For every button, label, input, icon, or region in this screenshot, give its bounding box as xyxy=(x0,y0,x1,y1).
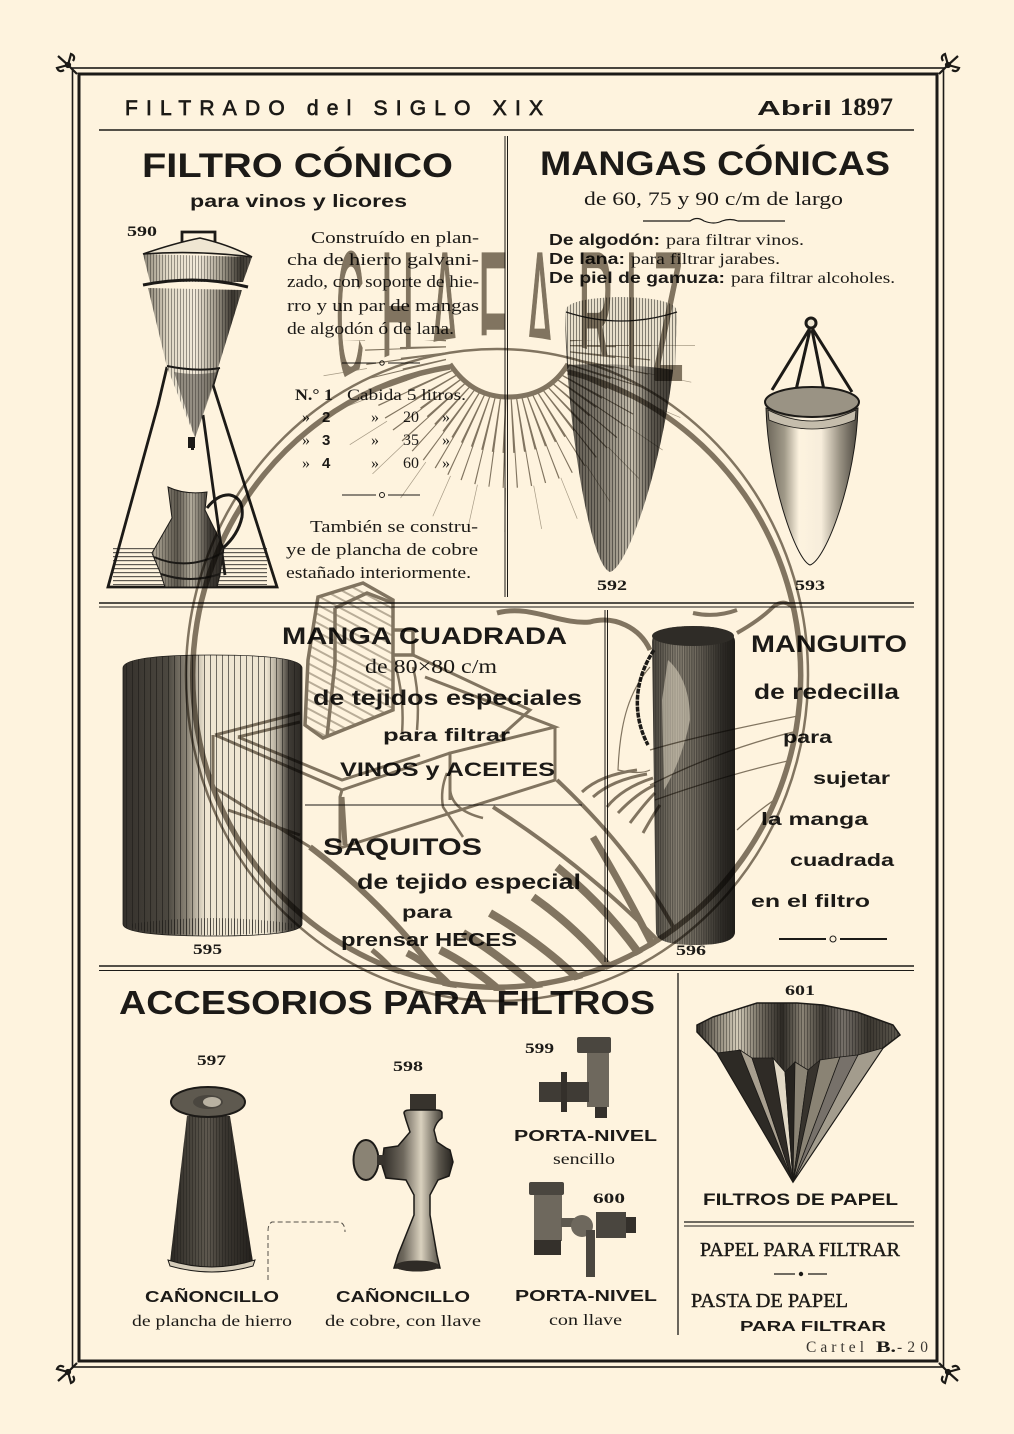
cords xyxy=(772,328,852,410)
description text: cha de hierro galvani- xyxy=(287,250,479,269)
label: porta-nivel con llave: con llave xyxy=(549,1312,622,1329)
illustration: tap 598 xyxy=(354,1094,453,1272)
item number 590: 590 xyxy=(127,224,157,240)
size table: N.° 1 xyxy=(295,387,333,404)
label 600: 600 xyxy=(593,1191,625,1207)
label: porta-nivel sencillo: PORTA-NIVEL xyxy=(514,1128,657,1145)
heading: saquitos: SAQUITOS xyxy=(323,834,482,861)
faint print marks xyxy=(268,1222,345,1280)
catalog number: Cartel xyxy=(806,1339,864,1356)
note: también en cobre xyxy=(286,517,478,582)
stamp word: F xyxy=(478,214,507,420)
panel: manguito xyxy=(637,626,907,959)
size table: Cabida 5 litros. xyxy=(347,387,466,404)
size table: » xyxy=(442,409,450,426)
stamp word: A xyxy=(525,215,554,420)
panel: filtro cónico xyxy=(108,147,479,587)
panel: mangas cónicas xyxy=(540,145,895,594)
illustration: hanging sleeve 593 xyxy=(765,318,859,565)
text: de tejidos especiales: de tejidos especiales xyxy=(313,687,582,710)
label: cañoncillo hierro xyxy=(132,1286,292,1330)
size table: » xyxy=(371,432,379,449)
stamp word: A xyxy=(430,215,459,420)
handle xyxy=(354,1140,378,1180)
description text: Construído en plan- xyxy=(311,228,479,247)
ornament xyxy=(779,936,887,942)
size table: 20 xyxy=(403,409,419,426)
stamp word: R xyxy=(578,213,614,420)
text: cuadrada: cuadrada xyxy=(790,850,894,870)
size table: 3 xyxy=(322,432,330,449)
illustration: cylinder 595 xyxy=(123,655,302,936)
label: cañoncillo hierro: de plancha de hierro xyxy=(132,1313,292,1330)
size table: » xyxy=(371,409,379,426)
description text: de algodón ó de lana. xyxy=(287,319,454,338)
materials list: para filtrar vinos. xyxy=(666,232,804,249)
stamp word: H xyxy=(381,215,414,420)
text: para filtrar: para filtrar xyxy=(383,725,510,745)
bag xyxy=(766,408,858,565)
size table: 35 xyxy=(403,432,419,449)
text: la manga: la manga xyxy=(761,809,868,829)
illustration: conical sleeve 592 xyxy=(565,297,677,572)
text: de tejido especial: de tejido especial xyxy=(357,871,581,894)
label 592: 592 xyxy=(597,578,627,594)
label: porta-nivel sencillo: sencillo xyxy=(553,1151,615,1168)
jug xyxy=(152,487,224,587)
text: para filtrar: PARA FILTRAR xyxy=(740,1318,886,1335)
text: de redecilla: de redecilla xyxy=(754,681,899,704)
spout xyxy=(188,437,195,448)
stand legs xyxy=(108,367,277,587)
materials list: para filtrar jarabes. xyxy=(631,251,780,268)
front pleats xyxy=(717,1048,883,1182)
illustration: conical filter on stand with jug xyxy=(108,232,277,587)
stamp zigzag book xyxy=(213,655,555,848)
materials list: De piel de gamuza: xyxy=(549,270,725,287)
illustration: pleated paper filter xyxy=(697,1003,900,1182)
catalog number xyxy=(806,1339,928,1356)
heading: filtro cónico: FILTRO CÓNICO xyxy=(142,147,453,185)
ornament divider xyxy=(342,492,420,498)
header xyxy=(125,94,893,121)
stamp ring xyxy=(186,349,808,1001)
label 597: 597 xyxy=(197,1053,226,1069)
catalog number: B. xyxy=(876,1339,896,1356)
label: porta-nivel sencillo xyxy=(514,1128,657,1168)
label 596: 596 xyxy=(676,943,707,959)
illustration: gauge holder 599 xyxy=(539,1037,611,1118)
divider xyxy=(305,804,582,806)
label: cañoncillo cobre xyxy=(325,1286,481,1330)
illustration: gauge holder 600 xyxy=(529,1182,636,1277)
subheading: para vinos y licores: para vinos y licores xyxy=(190,191,407,211)
stamp word: Z xyxy=(653,213,683,420)
stamp watermark xyxy=(184,250,810,1002)
size table: » xyxy=(302,432,310,449)
stamp word: I xyxy=(625,215,638,420)
illustration: mesh sleeve 596 xyxy=(637,626,735,945)
lid xyxy=(143,238,252,257)
header date xyxy=(757,94,893,121)
stamp word: C xyxy=(336,215,364,420)
stamp furrows xyxy=(308,716,796,991)
header date: Abril xyxy=(757,98,832,120)
materials list: para filtrar alcoholes. xyxy=(731,270,895,287)
materials list xyxy=(549,232,895,287)
stamp vines xyxy=(393,603,795,837)
hanging ring xyxy=(806,318,816,328)
header title: FILTRADO del SIGLO XIX xyxy=(125,97,543,120)
size table xyxy=(295,387,466,472)
text: sujetar: sujetar xyxy=(813,768,890,788)
ornament xyxy=(774,1272,827,1276)
label: filtros de papel: FILTROS DE PAPEL xyxy=(703,1191,898,1209)
illustration: pedestal 597 xyxy=(168,1087,255,1272)
note: también en cobre: También se constru- xyxy=(310,517,478,536)
text: en el filtro: en el filtro xyxy=(751,891,870,911)
heading: manga cuadrada: MANGA CUADRADA xyxy=(282,623,567,650)
upper vessel xyxy=(143,254,252,282)
size table: » xyxy=(442,455,450,472)
text: pasta de papel: PASTA DE PAPEL xyxy=(691,1290,848,1312)
size table: » xyxy=(442,432,450,449)
label 595: 595 xyxy=(193,942,222,958)
catalog number: -20 xyxy=(897,1339,928,1356)
text: para: para xyxy=(783,727,832,747)
page border frame xyxy=(72,68,944,1367)
description text: rro y un par de mangas xyxy=(287,296,479,315)
cone body xyxy=(148,288,242,438)
panel: manga cuadrada xyxy=(123,623,582,958)
panel: filtros de papel xyxy=(691,983,928,1356)
text: vinos y aceites: VINOS y ACEITES xyxy=(340,760,555,781)
label 599: 599 xyxy=(525,1041,554,1057)
materials list: De lana: xyxy=(549,251,625,268)
label: cañoncillo hierro: CAÑONCILLO xyxy=(145,1286,279,1306)
size table: » xyxy=(302,409,310,426)
heading: manguito: MANGUITO xyxy=(751,631,907,658)
size line: de 80×80 c/m xyxy=(365,656,498,678)
size table: 2 xyxy=(322,409,330,426)
label: cañoncillo cobre: CAÑONCILLO xyxy=(336,1286,470,1306)
ground shading xyxy=(113,548,267,585)
size table: » xyxy=(371,455,379,472)
stamp word xyxy=(336,213,683,420)
label 598: 598 xyxy=(393,1059,423,1075)
size table: 60 xyxy=(403,455,419,472)
heading: mangas cónicas: MANGAS CÓNICAS xyxy=(540,145,890,183)
label 601: 601 xyxy=(785,983,815,999)
size table: 4 xyxy=(322,455,331,472)
header date: 1897 xyxy=(840,94,893,121)
panel dividers xyxy=(99,130,914,1335)
label: cañoncillo cobre: de cobre, con llave xyxy=(325,1313,481,1330)
note: también en cobre: ye de plancha de cobre xyxy=(286,540,478,559)
description text xyxy=(287,228,479,338)
label: porta-nivel con llave: PORTA-NIVEL xyxy=(515,1288,657,1305)
stamp sun and rays xyxy=(324,340,695,532)
ornament divider xyxy=(342,361,420,365)
size table: » xyxy=(302,455,310,472)
description text: zado, con soporte de hie- xyxy=(287,272,479,291)
rims xyxy=(143,280,248,287)
materials list: De algodón: xyxy=(549,232,660,249)
subheading: lengths: de 60, 75 y 90 c/m de largo xyxy=(584,189,843,210)
panel: accesorios xyxy=(119,984,657,1330)
label: porta-nivel con llave xyxy=(515,1288,657,1329)
text: para: para xyxy=(402,902,452,922)
note: también en cobre: estañado interiormente. xyxy=(286,563,471,582)
heading: accesorios para filtros: ACCESORIOS PARA FILTROS xyxy=(119,984,655,1021)
label 593: 593 xyxy=(795,578,825,594)
text: papel para filtrar: PAPEL PARA FILTRAR xyxy=(700,1239,901,1261)
ornament divider xyxy=(643,218,785,223)
text: prensar heces: prensar HECES xyxy=(341,930,517,950)
stamp sack xyxy=(305,583,413,738)
